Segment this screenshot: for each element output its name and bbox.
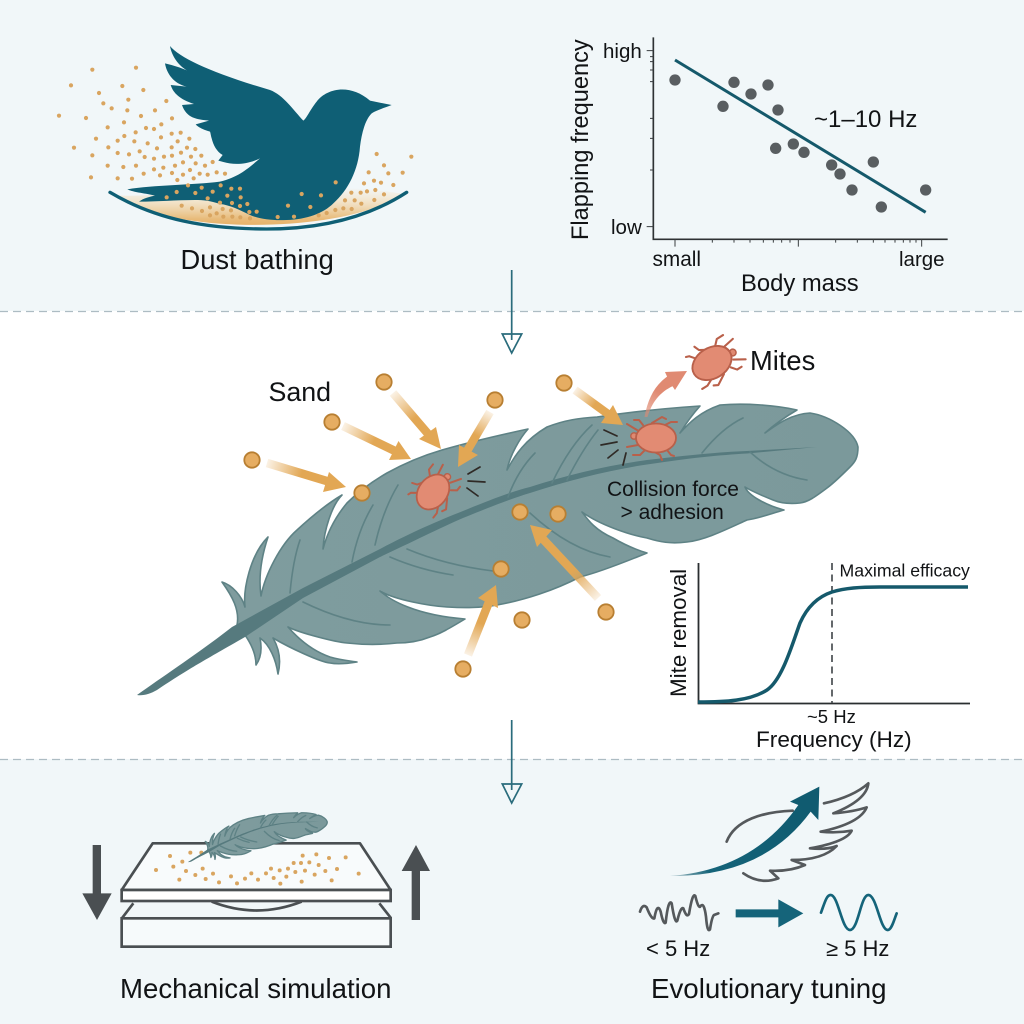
data points: [669, 74, 931, 213]
icon: bird silhouette: [127, 46, 392, 220]
axes: [653, 37, 948, 239]
wing outline: [727, 783, 868, 881]
trend line: [675, 60, 926, 212]
chart: flapping frequency vs body mass: Flapping frequency: [568, 39, 594, 240]
icon: mite on feather right: [627, 417, 677, 460]
label: collision force: [607, 478, 739, 524]
arrow: tuning: [736, 899, 803, 927]
chart: mite removal vs frequency: Mite removal: [666, 569, 691, 697]
icon: dislodged mite: [681, 327, 750, 393]
arrow: middle to bottom: [502, 720, 522, 803]
sand particles: [57, 66, 413, 220]
illustration: dust-bathing bird: [57, 46, 413, 229]
x-axis labels: small: [652, 248, 701, 271]
lens support: [212, 902, 302, 910]
threshold line: [831, 563, 833, 703]
noisy wave: [640, 895, 718, 930]
impact marks: [467, 430, 626, 496]
chart: mite removal vs frequency: Frequency (Hz): [756, 727, 912, 752]
sand arrows: [267, 390, 623, 655]
label: below 5 Hz: < 5 Hz: [646, 936, 710, 961]
response curve: [698, 587, 968, 702]
illustration: feather: [137, 404, 858, 695]
curved rising arrow: [670, 787, 819, 876]
chart: mite removal vs frequency: Maximal efficacy: [840, 561, 970, 581]
chart: mite removal vs frequency: [666, 561, 970, 752]
arrow: up: [402, 845, 430, 920]
panel: bottom background: [0, 759, 1024, 1024]
lower plate: [122, 903, 391, 918]
panel: top background: [0, 0, 1024, 311]
arrow: top to middle: [502, 270, 522, 353]
icon: mite on feather left: [403, 457, 467, 521]
range annotation: ~1–10 Hz: [814, 106, 917, 133]
chart: flapping frequency vs body mass: low: [611, 216, 642, 239]
label: Mechanical simulation: Mechanical simulation: [120, 973, 391, 1004]
arrow: mite leaves feather: [644, 371, 687, 417]
label: Evolutionary tuning: Evolutionary tuning: [651, 973, 886, 1004]
chart: mite removal vs frequency: ~5 Hz: [807, 706, 856, 727]
chart: flapping frequency vs body mass: Body mass: [741, 270, 859, 297]
sine wave: [821, 895, 897, 930]
illustration: mechanical simulation: [82, 843, 430, 947]
sand mound: [113, 187, 403, 225]
arrow: down: [82, 845, 112, 920]
label: collision force: > adhesion: [620, 501, 724, 524]
icon: small feather on plate: [188, 807, 328, 869]
label: collision force: Collision force: [607, 478, 739, 501]
sand grains: [244, 374, 614, 677]
label: at least 5 Hz: ≥ 5 Hz: [826, 936, 889, 961]
plate sand: [154, 851, 361, 886]
upper plate: [122, 843, 391, 890]
label: Mites: Mites: [750, 345, 815, 376]
heading: Dust bathing: Dust bathing: [180, 244, 334, 275]
dust bowl curve: [110, 192, 407, 229]
y-axis labels: high: [603, 40, 642, 63]
chart: flapping frequency vs body mass: [568, 37, 948, 297]
label: Sand: Sand: [268, 377, 331, 407]
axes: [698, 563, 970, 704]
chart: flapping frequency vs body mass: large: [899, 248, 945, 271]
illustration: evolutionary tuning: [640, 783, 897, 930]
